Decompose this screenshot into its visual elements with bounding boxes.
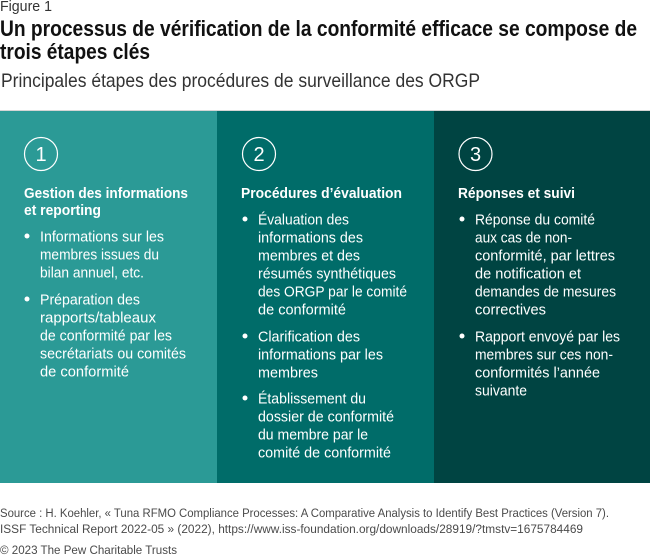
bullet: member report <box>460 330 620 400</box>
bullet: preparing reports <box>24 292 186 380</box>
title: trois étapes clés <box>0 39 150 64</box>
bullet: annual report information: membres issues du <box>40 248 159 264</box>
step number 3 <box>459 138 492 170</box>
bullet: committee response: de notification et <box>475 266 581 282</box>
heading: step 2: Procédures d’évaluation <box>241 185 402 202</box>
bullet: committee response <box>460 212 616 318</box>
bullet: member report: Rapport envoyé par les <box>475 330 620 346</box>
bullet: compliance record: dossier de conformité <box>258 410 394 426</box>
step number 3: 3 <box>470 144 481 166</box>
bullet: preparing reports: secrétariats ou comités <box>40 346 186 362</box>
heading: step 3: Réponses et suivi <box>458 185 575 202</box>
bullet: preparing reports: de conformité <box>40 364 129 380</box>
heading: step 1: et reporting <box>24 202 101 219</box>
bullet: evaluation of information: de conformité <box>258 302 346 318</box>
bullet: evaluation of information <box>242 212 407 318</box>
bullet: committee response: Réponse du comité <box>475 212 595 228</box>
bullet: evaluation of information: Évaluation des <box>258 212 349 228</box>
bullet: member report: conformités l’année <box>475 366 600 382</box>
subtitle: Principales étapes des procédures de surveillance des ORGP <box>1 70 480 92</box>
bullet: compliance record: comité de conformité <box>258 446 391 462</box>
heading: step 1: Gestion des informations <box>24 185 188 202</box>
bullet: compliance record: du membre par le <box>258 428 368 444</box>
bullet: committee response: conformité, par lettres <box>475 248 615 264</box>
bullet: compliance record <box>242 390 394 462</box>
bullet: compliance record: Établissement du <box>258 390 366 408</box>
bullet: committee response: aux cas de non- <box>475 230 572 246</box>
copyright: © 2023 The Pew Charitable Trusts <box>0 543 177 557</box>
step number 2 <box>242 138 276 170</box>
bullet: annual report information <box>24 230 164 282</box>
bullet: committee response: correctives <box>475 302 546 318</box>
bullet: committee response: demandes de mesures <box>475 284 616 300</box>
bullet: clarification: informations par les <box>258 348 383 364</box>
bullet: evaluation of information: membres et des <box>258 248 360 264</box>
panel: step 1 <box>0 111 217 483</box>
heading: step 1 <box>24 185 188 219</box>
bullet: clarification: Clarification des <box>258 330 360 346</box>
step number 2: 2 <box>253 144 265 166</box>
bullet: evaluation of information: résumés synthétiques <box>258 266 396 282</box>
panel: step 2 <box>217 111 434 483</box>
step number 1: 1 <box>35 144 47 166</box>
source note: ISSF Technical Report 2022-05 » (2022), https://www.iss-foundation.org/downloads/28919/?tmstv=1675784469 <box>0 522 583 536</box>
bullet: annual report information: bilan annuel, etc. <box>40 266 144 282</box>
bullet: preparing reports: Préparation des <box>40 292 140 308</box>
bullet: clarification: membres <box>258 366 318 382</box>
bullet: clarification <box>242 330 383 382</box>
title <box>0 16 637 64</box>
bullet: member report: suivante <box>475 384 527 400</box>
bullet: preparing reports: rapports/tableaux <box>40 310 157 326</box>
bullet: member report: membres sur ces non- <box>475 348 613 364</box>
bullet: evaluation of information: informations des <box>258 230 363 246</box>
bullet: preparing reports: de conformité par les <box>40 328 172 344</box>
bullet: evaluation of information: des ORGP par le comité <box>258 284 407 300</box>
source note <box>0 506 609 536</box>
panel: step 3 <box>434 111 650 483</box>
step number 1 <box>24 138 58 170</box>
bullet: annual report information: Informations sur les <box>40 230 164 246</box>
source note: Source : H. Koehler, « Tuna RFMO Compliance Processes: A Comparative Analysis to Identify Best Practices (Version 7). <box>0 506 609 520</box>
